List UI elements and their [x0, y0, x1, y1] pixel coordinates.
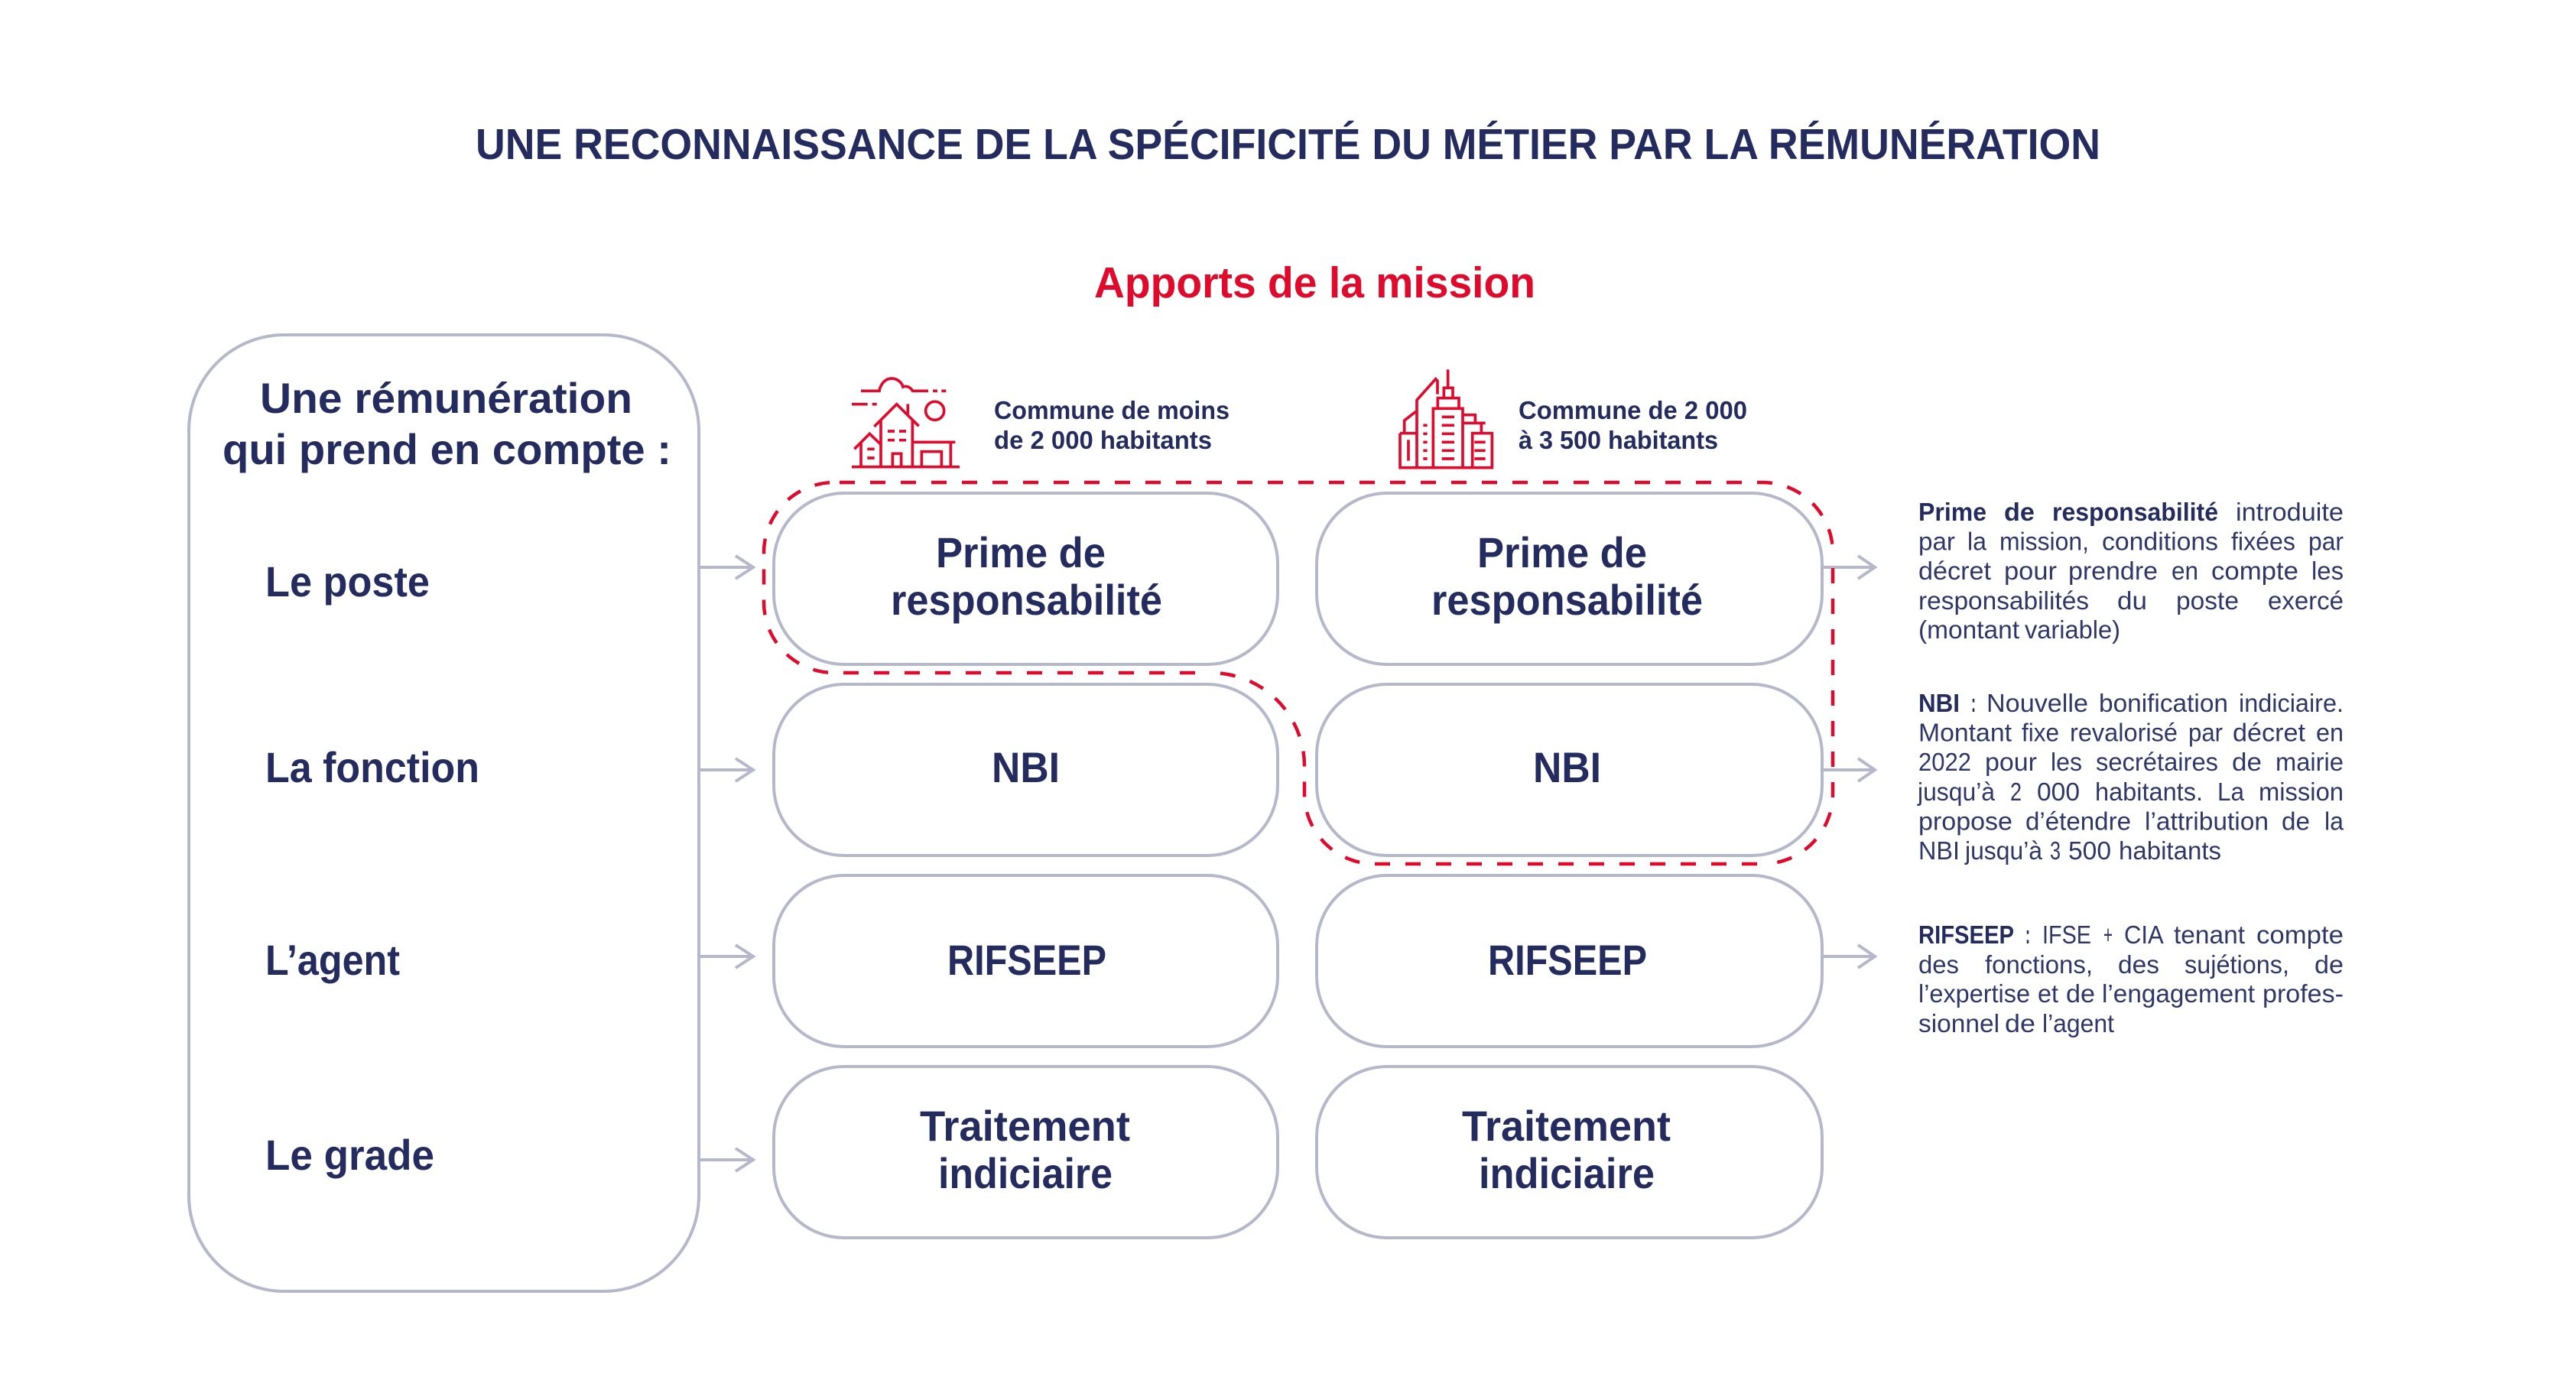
text block: prime de responsabilité: du — [2117, 586, 2147, 615]
box: prime de responsabilité, column 1 — [774, 493, 1278, 664]
label: le grade: Le grade — [265, 1131, 434, 1179]
text block: prime de responsabilité: responsabilités — [1918, 586, 2089, 615]
box: prime de responsabilité, column 2: responsabilité — [1431, 576, 1703, 624]
text block: NBI: 2 — [2010, 778, 2022, 806]
label: le poste: Le poste — [265, 557, 430, 606]
text block: NBI — [1917, 689, 2344, 865]
panel heading: Une rémunération — [260, 374, 632, 422]
column header: commune de 2 000 à 3 500 habitants — [1519, 396, 1747, 454]
text block: NBI: l’attribution — [2145, 807, 2269, 835]
text block: prime de responsabilité: Prime — [1918, 498, 1986, 526]
text block: RIFSEEP: sionnel — [1918, 1009, 1999, 1037]
box: traitement indiciaire, column 1: indiciaire — [938, 1149, 1113, 1197]
column header: commune de 2 000 à 3 500 habitants: Commune de 2 000 — [1519, 396, 1747, 424]
text block: prime de responsabilité: prendre — [2068, 557, 2158, 585]
label: l'agent: L’agent — [265, 936, 400, 984]
text block: prime de responsabilité: compte — [2211, 557, 2298, 585]
text block: prime de responsabilité: variable) — [2025, 615, 2120, 644]
heading: apports de la mission: Apports de la mission — [1094, 258, 1535, 307]
arrow: prime to description — [1822, 556, 1875, 579]
text block: prime de responsabilité: par — [1918, 528, 1955, 555]
text block: NBI: NBI — [1918, 689, 1960, 717]
text block: prime de responsabilité: exercé — [2268, 586, 2344, 615]
text block: RIFSEEP: IFSE — [2042, 921, 2091, 949]
text block: RIFSEEP: de — [2315, 950, 2344, 979]
text block: NBI: les — [2051, 748, 2082, 776]
text block: RIFSEEP: CIA — [2124, 921, 2164, 949]
text block: NBI: 2022 — [1918, 748, 1971, 776]
text block: NBI: bonification — [2099, 689, 2228, 717]
text block: prime de responsabilité: la — [1967, 528, 1987, 555]
panel heading — [223, 374, 671, 473]
text block: prime de responsabilité: responsabilité — [2052, 498, 2218, 526]
box: prime de responsabilité, column 1: Prime de — [936, 528, 1106, 576]
text block: NBI: d’étendre — [2025, 807, 2131, 835]
text block: RIFSEEP: de — [2066, 979, 2095, 1008]
text block: RIFSEEP: compte — [2256, 921, 2344, 949]
text block: prime de responsabilité: poste — [2176, 586, 2239, 615]
box: traitement indiciaire, column 2 — [1317, 1067, 1822, 1238]
text block: NBI: jusqu’à — [1917, 778, 1996, 806]
box: prime de responsabilité, column 2: Prime de — [1477, 528, 1647, 576]
text block: NBI: secrétaires — [2096, 748, 2218, 776]
box: NBI, column 1: NBI — [992, 743, 1060, 791]
arrow: grade to traitement — [699, 1148, 753, 1171]
text block: prime de responsabilité: en — [2172, 557, 2198, 585]
text block: RIFSEEP: + — [2103, 921, 2113, 949]
text block: NBI: NBI — [1918, 836, 1960, 865]
text block: NBI: habitants. — [2095, 778, 2203, 806]
text block: NBI: Montant — [1918, 719, 2012, 746]
text block: NBI: de — [2232, 748, 2262, 776]
text block: NBI: mission — [2259, 778, 2344, 806]
text block: NBI: 3 — [2050, 836, 2061, 865]
column header: commune de 2 000 à 3 500 habitants: à 3 500 habitants — [1519, 426, 1718, 454]
text block: RIFSEEP: : — [2025, 921, 2030, 949]
text block: NBI: décret — [2233, 719, 2305, 746]
dashed outline: mission contributions — [764, 482, 1833, 864]
title: UNE RECONNAISSANCE DE LA SPÉCIFICITÉ DU MÉTIER PAR LA RÉMUNÉRATION — [476, 120, 2100, 169]
box: RIFSEEP, column 2: RIFSEEP — [1488, 936, 1647, 984]
icon: city buildings — [1400, 369, 1492, 468]
text block: prime de responsabilité: décret — [1918, 557, 1991, 585]
box: RIFSEEP, column 1 — [774, 875, 1278, 1047]
text block: RIFSEEP: profes- — [2263, 979, 2344, 1008]
text block: prime de responsabilité: introduite — [2236, 498, 2344, 526]
text block: prime de responsabilité: de — [2004, 498, 2035, 526]
text block: RIFSEEP: et — [2038, 979, 2058, 1008]
text block: NBI: fixe — [2022, 719, 2059, 746]
text block: prime de responsabilité: par — [2308, 528, 2344, 555]
text block: RIFSEEP: RIFSEEP — [1918, 921, 2014, 949]
text block: RIFSEEP — [1918, 921, 2344, 1037]
box: NBI, column 2: NBI — [1533, 743, 1601, 791]
text block: NBI: jusqu’à — [1964, 836, 2043, 865]
text block: RIFSEEP: des — [1918, 950, 1959, 979]
arrow: NBI to description — [1822, 758, 1875, 781]
text block: NBI: indiciaire. — [2239, 689, 2344, 717]
text block: prime de responsabilité: conditions — [2102, 528, 2218, 555]
text block: prime de responsabilité: fixées — [2231, 528, 2295, 555]
text block: NBI: mairie — [2276, 748, 2344, 776]
box: traitement indiciaire, column 2: Traitement — [1462, 1102, 1671, 1150]
text block: NBI: revalorisé — [2070, 719, 2178, 746]
text block: RIFSEEP: l’engagement — [2102, 979, 2255, 1008]
text block: NBI: Nouvelle — [1986, 689, 2088, 717]
box: prime de responsabilité, column 1: responsabilité — [891, 576, 1162, 624]
text block: NBI: 500 — [2068, 836, 2111, 865]
text block: NBI: : — [1971, 689, 1976, 717]
text block: NBI: pour — [1985, 748, 2037, 776]
text block: NBI: la — [2324, 807, 2344, 835]
text block: NBI: par — [2188, 719, 2223, 746]
text block: NBI: en — [2316, 719, 2344, 746]
text block: RIFSEEP: l’agent — [2042, 1009, 2114, 1037]
text block: prime de responsabilité: pour — [2004, 557, 2057, 585]
text block: NBI: habitants — [2119, 836, 2221, 865]
text block: RIFSEEP: fonctions, — [1985, 950, 2093, 979]
box: traitement indiciaire, column 1: Traitement — [920, 1102, 1130, 1150]
text block: prime de responsabilité: (montant — [1918, 615, 2019, 644]
label: la fonction: La fonction — [265, 743, 479, 791]
arrow: fonction to NBI — [699, 758, 753, 781]
box: traitement indiciaire, column 2: indiciaire — [1479, 1149, 1655, 1197]
text block: NBI: de — [2282, 807, 2310, 835]
box: prime de responsabilité, column 2 — [1317, 493, 1822, 664]
box: RIFSEEP, column 1: RIFSEEP — [947, 936, 1106, 984]
arrow: RIFSEEP to description — [1822, 945, 1875, 968]
arrow: poste to prime — [699, 556, 753, 579]
box: RIFSEEP, column 2 — [1317, 875, 1822, 1047]
text block: prime de responsabilité: les — [2311, 557, 2344, 585]
panel heading: qui prend en compte : — [223, 425, 671, 473]
text block: NBI: La — [2217, 778, 2245, 806]
arrow: agent to RIFSEEP — [699, 945, 753, 968]
text block: RIFSEEP: tenant — [2174, 921, 2245, 949]
text block: NBI: propose — [1918, 807, 2012, 835]
icon: village houses — [852, 378, 960, 467]
panel: une rémunération qui prend en compte — [189, 335, 699, 1291]
text block: RIFSEEP: l’expertise — [1918, 979, 2030, 1008]
text block: prime de responsabilité — [1918, 498, 2344, 644]
text block: RIFSEEP: des — [2118, 950, 2159, 979]
column header: commune de moins de 2 000 habitants — [994, 396, 1230, 454]
text block: RIFSEEP: sujétions, — [2185, 950, 2289, 979]
box: NBI, column 1 — [774, 684, 1278, 856]
text block: RIFSEEP: de — [2005, 1009, 2035, 1037]
text block: NBI: 000 — [2037, 778, 2080, 806]
text block: prime de responsabilité: mission, — [1999, 528, 2089, 555]
column header: commune de moins de 2 000 habitants: de 2 000 habitants — [994, 426, 1212, 454]
box: NBI, column 2 — [1317, 684, 1822, 856]
column header: commune de moins de 2 000 habitants: Commune de moins — [994, 396, 1230, 424]
box: traitement indiciaire, column 1 — [774, 1067, 1278, 1238]
